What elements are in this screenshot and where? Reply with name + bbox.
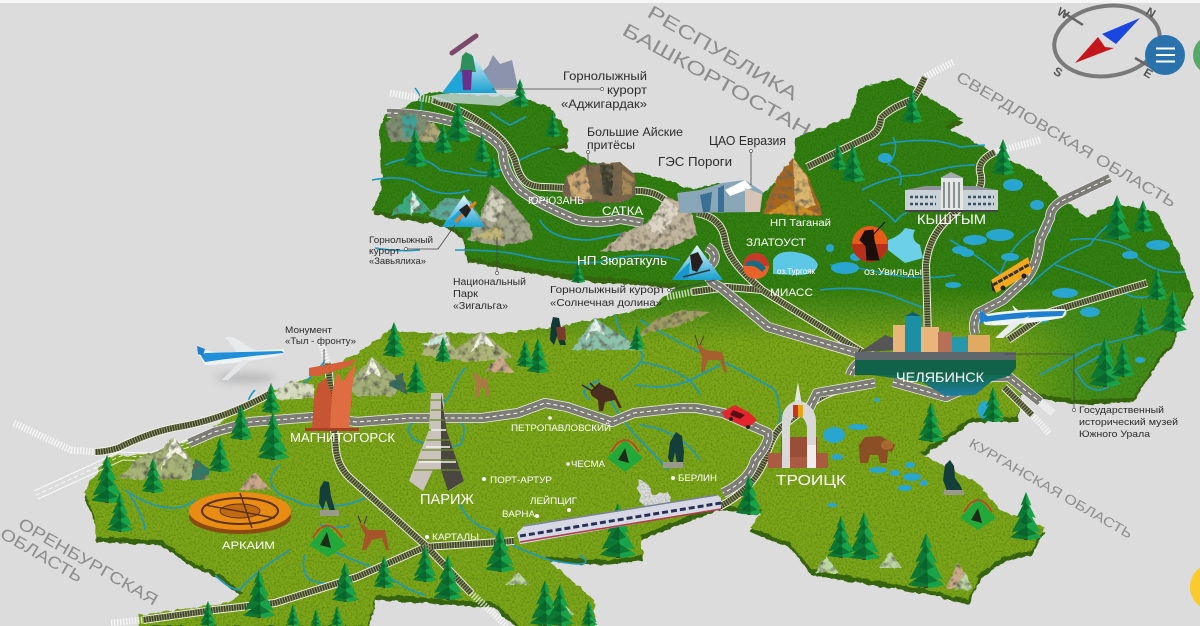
- label: Монумент: «Тыл - фронту»: [285, 336, 356, 347]
- icon: hikers centre: [663, 432, 684, 468]
- label: НП Зюраткуль: НП Зюраткуль: [577, 253, 667, 268]
- label: Аджигардак: [561, 69, 648, 111]
- town: Сатка: САТКА: [602, 204, 643, 218]
- icon: НП Зюраткуль rock: [600, 197, 697, 252]
- labels: towns on the map: [222, 195, 986, 552]
- town: Миасс: МИАСС: [770, 287, 813, 299]
- label: ГЭС Пороги: ГЭС Пороги: [658, 155, 732, 169]
- label: Монумент: Монумент: [285, 325, 333, 336]
- trees: [91, 79, 1187, 626]
- icon: ЦАО Евразия buildings: [677, 180, 763, 213]
- icon: Аркаим ring: [189, 492, 291, 534]
- compass letters: [1051, 4, 1158, 81]
- village: Лейпциг: [530, 495, 577, 512]
- icon: Большие Айские притёсы rock: [562, 162, 636, 203]
- label: Завьялиха: курорт: [369, 246, 401, 257]
- label: оз.Увильды: оз.Увильды: [864, 267, 922, 278]
- icon: hikers east: [943, 460, 964, 495]
- icon: red car: [722, 405, 757, 429]
- leader lines: [404, 88, 1076, 412]
- mountain: Завьялиха ridge: [390, 190, 483, 222]
- button: green circle: [1193, 35, 1200, 75]
- icon: moose: [582, 383, 622, 411]
- icon: monument Тыл — фронту: [305, 359, 359, 431]
- town: Челябинск: ЧЕЛЯБИНСК: [896, 369, 985, 385]
- compass letters: N: [1144, 4, 1158, 21]
- leader: ЦАО Евразия: [750, 152, 752, 185]
- label: Зигальга: [453, 277, 526, 312]
- roads: [34, 113, 1110, 499]
- town: Юрюзань: ЮРЮЗАНЬ: [528, 195, 584, 207]
- icon: tent centre: [607, 440, 643, 472]
- compass letters: S: [1051, 64, 1065, 80]
- label: Республика Башкортостан: [619, 2, 814, 141]
- button: menu: [1145, 35, 1185, 75]
- button: yellow circle: [1190, 563, 1200, 611]
- icon: ski resort Завьялиха: [442, 195, 485, 227]
- label: Большие Айские притёсы: Большие Айские: [587, 125, 683, 139]
- icon: ski resort Аджигардак: [430, 36, 520, 106]
- label: Большие Айские притёсы: [587, 125, 683, 152]
- Chelyabinsk banner: [855, 352, 1016, 396]
- village: Порт-Артур: ПОРТ-АРТУР: [490, 475, 552, 485]
- label: оз.Тургояк: оз.Тургояк: [777, 267, 815, 276]
- icon: deer small: [472, 373, 490, 397]
- icon: hikers north: [550, 317, 566, 345]
- label: Зигальга: Национальный: [453, 277, 526, 288]
- railway lines: ghost ends off the map: [14, 62, 1049, 626]
- village: Варна: ВАРНА: [502, 509, 535, 519]
- compass needle north: [1102, 18, 1140, 44]
- label: Оренбургская область: [0, 515, 161, 609]
- rocks: small: [239, 355, 973, 588]
- lakes: [823, 153, 1170, 507]
- icon: Челябинск city: [855, 312, 1016, 396]
- label: Монумент: [285, 325, 356, 347]
- compass: [1050, 0, 1164, 83]
- village: Чесма: ЧЕСМА: [571, 459, 605, 469]
- village: Берлин: БЕРЛИН: [678, 473, 717, 483]
- rivers: [125, 88, 1185, 595]
- label: Зигальга: Парк: [453, 289, 479, 300]
- village: Петропавловский: [511, 416, 611, 433]
- leader: Зигальга: [496, 237, 498, 272]
- village: Карталы: КАРТАЛЫ: [432, 532, 479, 542]
- label: Аджигардак: курорт: [607, 83, 648, 97]
- town: Париж: ПАРИЖ: [420, 491, 474, 508]
- icon: deer north: [695, 335, 727, 372]
- town: Кыштым: КЫШТЫМ: [917, 211, 986, 227]
- icon: ski resort Солнечная долина: [672, 245, 723, 280]
- icon: bus: [991, 257, 1032, 293]
- icon: Зигальга rock: [467, 185, 533, 246]
- icon: hikers near Магнитогорск railway: [319, 481, 339, 516]
- lake: Увильды with badge: [852, 222, 923, 263]
- label: Солнечная долина: Горнолыжный курорт: [550, 284, 665, 296]
- mountain range: Магнитогорск east: [346, 357, 408, 396]
- icon: НП Таганай mountain: [762, 158, 823, 216]
- label: Оренбургская область: ОРЕНБУРГСКАЯ: [15, 515, 161, 609]
- label: Солнечная долина: «Солнечная долина»: [550, 297, 662, 309]
- leader: Солнечная долина: [670, 280, 715, 290]
- leader: monument: [323, 349, 325, 366]
- icon: train: [517, 495, 721, 544]
- label: Аркаим: АРКАИМ: [222, 540, 275, 552]
- label: Завьялиха: [369, 235, 433, 267]
- compass needle south: [1075, 37, 1114, 63]
- leader: Аджигардак: [492, 88, 600, 90]
- label: Аджигардак: «Аджигардак»: [561, 97, 647, 111]
- icon: airplane Магнитогорск: [197, 337, 285, 383]
- village: Петропавловский: ПЕТРОПАВЛОВСКИЙ: [511, 422, 611, 433]
- top edge strip: [0, 0, 1200, 3]
- label: Государственный музей: [1079, 405, 1178, 440]
- label: Аджигардак: Горнолыжный: [563, 69, 647, 83]
- mountain range: north edge east: [571, 310, 710, 350]
- label: Государственный музей: исторический музей: [1079, 417, 1178, 428]
- icon: Эйфелева башня (Париж): [409, 393, 464, 491]
- label: Государственный музей: Южного Урала: [1079, 429, 1151, 440]
- compass letters: W: [1055, 4, 1072, 22]
- icon: deer near tent: [358, 516, 389, 550]
- town: Златоуст: ЗЛАТОУСТ: [746, 237, 806, 249]
- icon: tent near Аркаим: [309, 525, 346, 557]
- mountains: [118, 112, 973, 615]
- icon: airplane near Челябинск: [980, 305, 1066, 338]
- icon: Троицк arch: [768, 382, 828, 468]
- lake: Тургояк with badge: [743, 252, 818, 279]
- mountain range: west edge: [118, 437, 210, 480]
- leader: исторический музей: [1005, 354, 1074, 408]
- town: Магнитогорск: МАГНИТОГОРСК: [290, 430, 395, 445]
- label: Курганская область: КУРГАНСКАЯ ОБЛАСТЬ: [966, 436, 1135, 542]
- mountain range: north edge centre: [421, 331, 514, 362]
- label: Государственный музей: Государственный: [1079, 405, 1164, 416]
- icon: tent east: [960, 498, 996, 530]
- label: Завьялиха: Горнолыжный: [369, 235, 433, 246]
- label: Республика Башкортостан: БАШКОРТОСТАН: [619, 20, 814, 141]
- icon: Кыштым palace: [905, 172, 998, 212]
- label: Зигальга: «Зигальга»: [453, 301, 508, 312]
- label: Большие Айские притёсы: притёсы: [587, 138, 635, 152]
- label: Свердловская область: СВЕРДЛОВСКАЯ ОБЛАСТЬ: [953, 69, 1179, 211]
- label: ЦАО Евразия: ЦАО Евразия: [709, 134, 786, 148]
- compass letters: E: [1141, 65, 1155, 81]
- mountain range: Магнитогорск west: [271, 381, 314, 400]
- rocks: white-green: [505, 551, 973, 615]
- label: НП Таганай: НП Таганай: [770, 218, 831, 229]
- leader: Большие Айские притёсы: [587, 153, 589, 170]
- label: Республика Башкортостан: РЕСПУБЛИКА: [644, 2, 802, 106]
- label: Завьялиха: «Завьялиха»: [369, 256, 426, 267]
- leader: Завьялиха: [407, 225, 455, 249]
- mountain: north-west waterfall ridge: [385, 112, 448, 142]
- town: Троицк: ТРОИЦК: [776, 472, 846, 489]
- labels: dark callouts: [285, 69, 1178, 440]
- road: ghost ends: [34, 402, 1053, 499]
- label: Солнечная долина: [550, 284, 665, 309]
- icon: bear: [859, 436, 895, 463]
- village: Лейпциг: ЛЕЙПЦИГ: [530, 495, 577, 506]
